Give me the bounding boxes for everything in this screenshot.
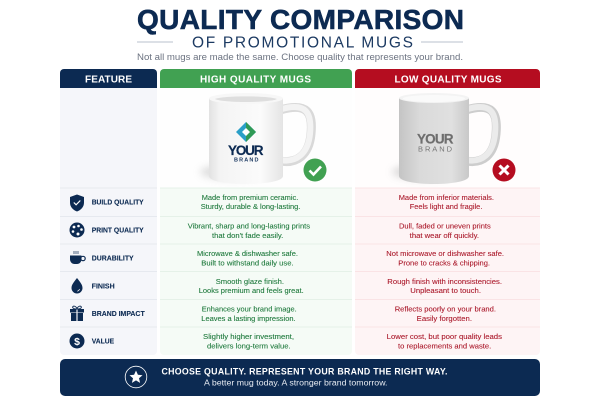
text: value low: to replacements and waste. (398, 341, 491, 350)
panel: low quality column (355, 69, 540, 355)
image: grey plain mug (392, 93, 496, 184)
text: brand impact high: Enhances your brand image. (202, 304, 297, 314)
text: durability low: Prone to cracks & chipping. (398, 258, 490, 267)
text: durability high: Microwave & dishwasher safe. (197, 249, 298, 258)
text: build quality high: Sturdy, durable & long-lasting. (201, 202, 300, 211)
mug text: your brand faded: BRAND (418, 144, 453, 154)
tagline: Not all mugs are made the same. Choose quality that represents your brand. (137, 52, 463, 62)
banner subline: A better mug today. A stronger brand tomorrow. (204, 378, 388, 388)
text: brand impact low: Reflects poorly on your brand. (395, 304, 496, 314)
subtitle with rules: OF PROMOTIONAL MUGS (192, 34, 413, 52)
text: print quality high (188, 222, 310, 240)
panel: feature column (60, 69, 157, 355)
panel: feature column: FEATURE (85, 74, 132, 86)
text: build quality low: Feels light and fragile. (410, 202, 482, 211)
logo mark (236, 122, 256, 142)
banner headline: CHOOSE QUALITY. REPRESENT YOUR BRAND THE RIGHT WAY. (162, 366, 448, 376)
callout banner (60, 359, 540, 396)
text: print quality low: Dull, faded or uneven prints (399, 222, 491, 230)
text: durability high: Built to withstand daily use. (201, 258, 294, 267)
text: finish high (199, 277, 304, 295)
icon: red cross badge (492, 158, 516, 182)
panel: high quality column (160, 69, 352, 355)
text: durability high (197, 249, 298, 267)
icon: value dollar (70, 334, 84, 348)
text: build quality high (201, 193, 300, 211)
text: value high (203, 332, 294, 350)
label: value: VALUE (92, 338, 115, 346)
text: finish high: Smooth glaze finish. (216, 277, 284, 286)
label: durability: DURABILITY (92, 256, 134, 262)
icon: build quality shield (70, 194, 84, 212)
text: brand impact low (395, 304, 496, 323)
label: build quality: BUILD QUALITY (92, 200, 144, 206)
text: durability low: Not microwave or dishwasher safe. (386, 249, 504, 258)
mug text: your brand: YOUR (228, 143, 264, 158)
text: finish low: Unpleasant to touch. (410, 286, 481, 295)
text: print quality low: that wear off quickly. (410, 231, 479, 240)
label: print quality: PRINT QUALITY (92, 228, 144, 234)
text: value high: Slightly higher investment, (203, 332, 294, 341)
text: finish low: Rough finish with inconsistencies. (387, 277, 502, 286)
icon: green check badge (304, 158, 326, 182)
text: build quality low (399, 193, 494, 211)
icon: brand impact gift (70, 306, 84, 321)
label: finish: FINISH (92, 284, 115, 290)
image: white branded mug (200, 93, 311, 184)
icon: star in circle (125, 366, 147, 388)
text: finish high: Looks premium and feels great. (199, 286, 304, 295)
heading: low quality: LOW QUALITY MUGS (394, 74, 502, 86)
text: build quality low: Made from inferior materials. (399, 193, 494, 202)
label: brand impact: BRAND IMPACT (92, 311, 145, 318)
text: finish low (387, 277, 502, 295)
icon: print quality palette (70, 222, 84, 238)
text: value low: Lower cost, but poor quality leads (387, 332, 502, 341)
title: QUALITY COMPARISON (137, 4, 464, 35)
icon: durability cup (70, 251, 85, 264)
heading: high quality: HIGH QUALITY MUGS (200, 74, 311, 86)
text: print quality low (399, 222, 491, 240)
icon: finish drop (72, 278, 82, 294)
text: build quality high: Made from premium ceramic. (202, 193, 298, 202)
text: durability low (386, 249, 504, 267)
mug text: your brand faded: YOUR (417, 132, 454, 146)
text: value high: delivers long-term value. (207, 341, 291, 350)
text: print quality high: that don't fade easily. (212, 231, 283, 240)
text: brand impact low: Easily forgotten. (417, 314, 472, 323)
text: brand impact high (201, 304, 297, 323)
text: value low (387, 332, 502, 350)
text: brand impact high: Leaves a lasting impression. (201, 314, 296, 323)
text: print quality high: Vibrant, sharp and long-lasting prints (188, 222, 310, 230)
icon: value dollar: $ (74, 336, 80, 348)
mug text: your brand: BRAND (234, 158, 259, 164)
mug text: your brand faded (417, 132, 454, 154)
